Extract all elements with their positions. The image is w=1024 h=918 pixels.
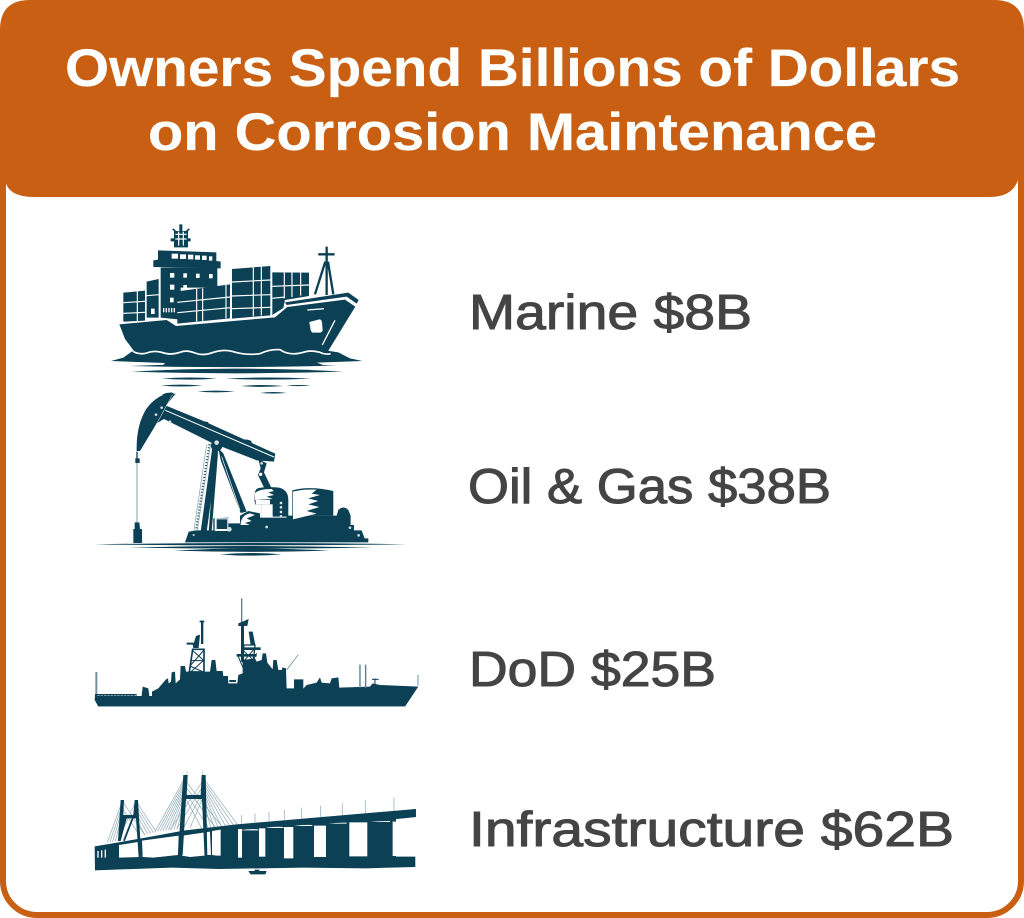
cable fans xyxy=(107,778,237,842)
mast top xyxy=(171,224,191,247)
icon: cable-stayed bridge xyxy=(95,770,416,874)
aft mast xyxy=(95,672,97,694)
ground reflection xyxy=(95,543,407,545)
bridge xyxy=(153,250,221,268)
gaps between piers xyxy=(97,820,416,858)
panel: header banner xyxy=(0,0,1024,197)
title: Owners Spend Billions of Dollars xyxy=(65,39,960,98)
containers xyxy=(123,291,145,322)
wave line xyxy=(133,350,331,355)
towers xyxy=(178,775,211,858)
title: on Corrosion Maintenance xyxy=(148,103,877,162)
gearbox xyxy=(254,487,288,518)
storage tank xyxy=(292,488,333,516)
label: Infrastructure: Infrastructure $62B xyxy=(469,803,954,857)
samson post xyxy=(211,440,222,451)
hull xyxy=(119,300,355,352)
base xyxy=(185,507,368,542)
label: Marine: Marine $8B xyxy=(469,286,752,340)
radar details and masts xyxy=(287,655,298,670)
water xyxy=(111,350,362,365)
title xyxy=(65,39,960,162)
forward mast xyxy=(187,621,203,648)
icon: container ship xyxy=(111,224,362,395)
icon: navy warship xyxy=(95,598,418,707)
mast on bow xyxy=(315,247,335,295)
label: DoD: DoD $25B xyxy=(469,643,716,697)
label: Oil & Gas: Oil & Gas $38B xyxy=(468,460,831,514)
polished rod and wellhead xyxy=(135,452,140,463)
boat xyxy=(248,871,267,874)
icon: oil pump jack xyxy=(95,392,407,556)
hull and superstructure xyxy=(95,653,418,707)
bow rail xyxy=(285,293,359,305)
reflections xyxy=(130,364,337,367)
deck, piers and ground mass xyxy=(95,809,416,870)
small drum and details xyxy=(215,518,228,531)
horsehead and beam xyxy=(137,392,275,462)
main mast xyxy=(241,598,242,623)
pitman arm xyxy=(258,459,272,490)
